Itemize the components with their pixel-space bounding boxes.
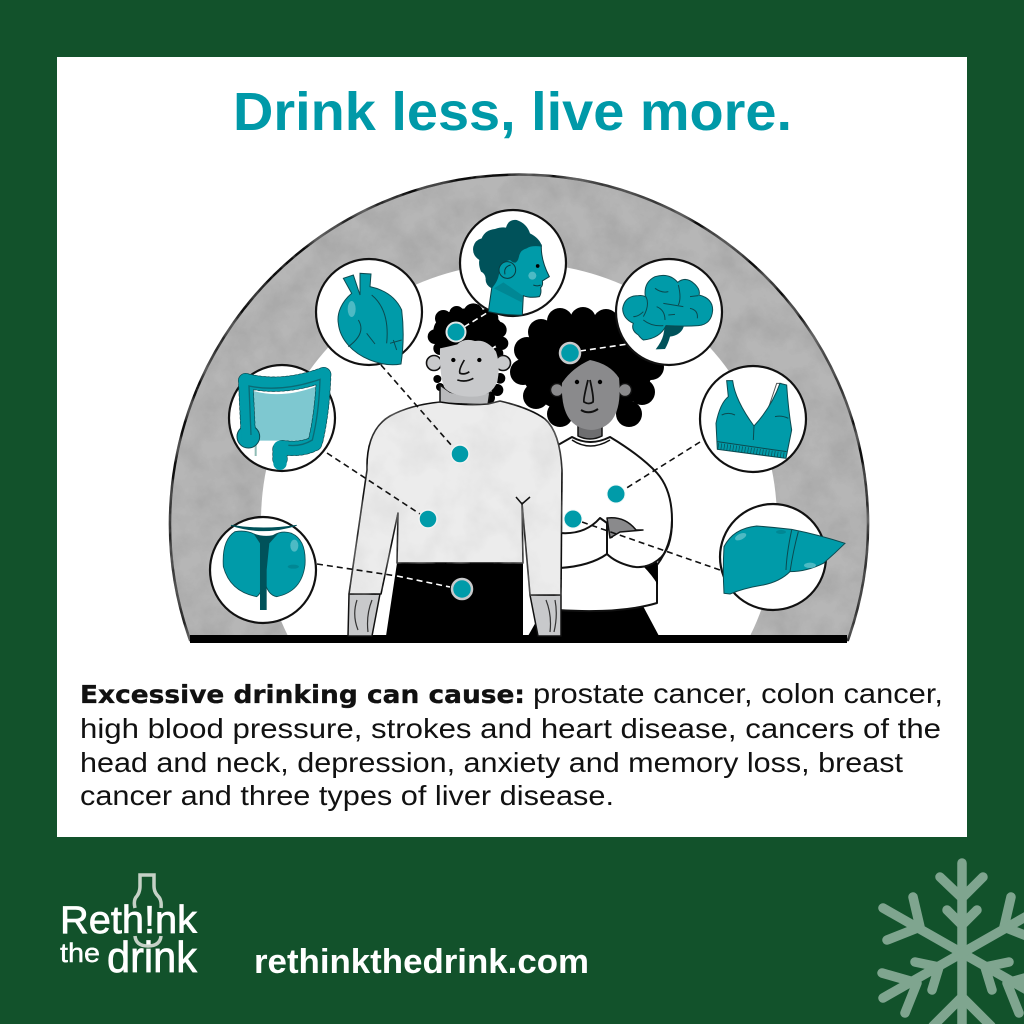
- icon: prostate: [223, 525, 305, 610]
- icon: head: [473, 220, 549, 315]
- bottle outline: [134, 875, 161, 946]
- marker dots: [419, 322, 625, 599]
- woman neck: [578, 425, 602, 439]
- man figure: [348, 303, 562, 636]
- man face: [440, 340, 499, 397]
- woman figure: [510, 307, 672, 636]
- icon: heart: [338, 273, 403, 365]
- logo wordmark: Reth!nk: [60, 899, 198, 942]
- icon: snowflake: [882, 863, 1024, 1024]
- man sweater: [349, 401, 562, 595]
- logo: Rethink the drink: [60, 875, 198, 982]
- circle: brain: [616, 259, 722, 365]
- circle: prostate: [210, 517, 316, 623]
- circle: colon: [229, 365, 335, 471]
- logo drink word: drink: [107, 933, 198, 982]
- circle: liver: [720, 504, 845, 610]
- ground line: [190, 635, 847, 643]
- website address: rethinkthedrink.com: [254, 943, 589, 981]
- white inner arch: [261, 263, 777, 636]
- dashed connectors: [317, 365, 720, 576]
- icon: brain: [623, 275, 713, 349]
- logo second line: the: [60, 938, 100, 968]
- icon: colon: [237, 375, 324, 463]
- woman elbow shadow: [643, 562, 658, 585]
- illustration: [170, 175, 868, 643]
- circle: heart: [316, 259, 422, 365]
- woman sweater: [558, 437, 672, 611]
- body text block: high blood pressure, strokes and heart disease, cancers of the: [80, 713, 941, 744]
- circle: breast: [700, 366, 806, 472]
- white dashed connectors on black: [397, 311, 628, 587]
- woman hand: [607, 518, 643, 538]
- body text block: head and neck, depression, anxiety and memory loss, breast: [80, 747, 903, 778]
- man ears: [426, 356, 510, 370]
- woman collar: [572, 440, 610, 446]
- man hands: [348, 594, 561, 636]
- man trousers: [386, 563, 523, 636]
- body text block: [80, 678, 943, 811]
- circle: head and neck: [460, 210, 566, 316]
- body text block: prostate cancer, colon cancer,: [533, 678, 943, 709]
- grey marble arch: [170, 175, 868, 640]
- man hair: [428, 303, 508, 404]
- man neck: [440, 385, 490, 405]
- icon: bra: [716, 381, 792, 458]
- body text block: Excessive drinking can cause:: [80, 680, 525, 709]
- man finger lines: [355, 600, 556, 632]
- white content panel: [57, 57, 967, 837]
- woman hair: [510, 307, 664, 427]
- icon: liver: [723, 526, 845, 594]
- woman face: [550, 360, 632, 430]
- woman trousers: [528, 606, 659, 636]
- man armpit crease: [516, 497, 530, 504]
- woman crossed arms: [560, 518, 672, 568]
- title: Drink less, live more.: [233, 82, 792, 142]
- body text block: cancer and three types of liver disease.: [80, 780, 614, 811]
